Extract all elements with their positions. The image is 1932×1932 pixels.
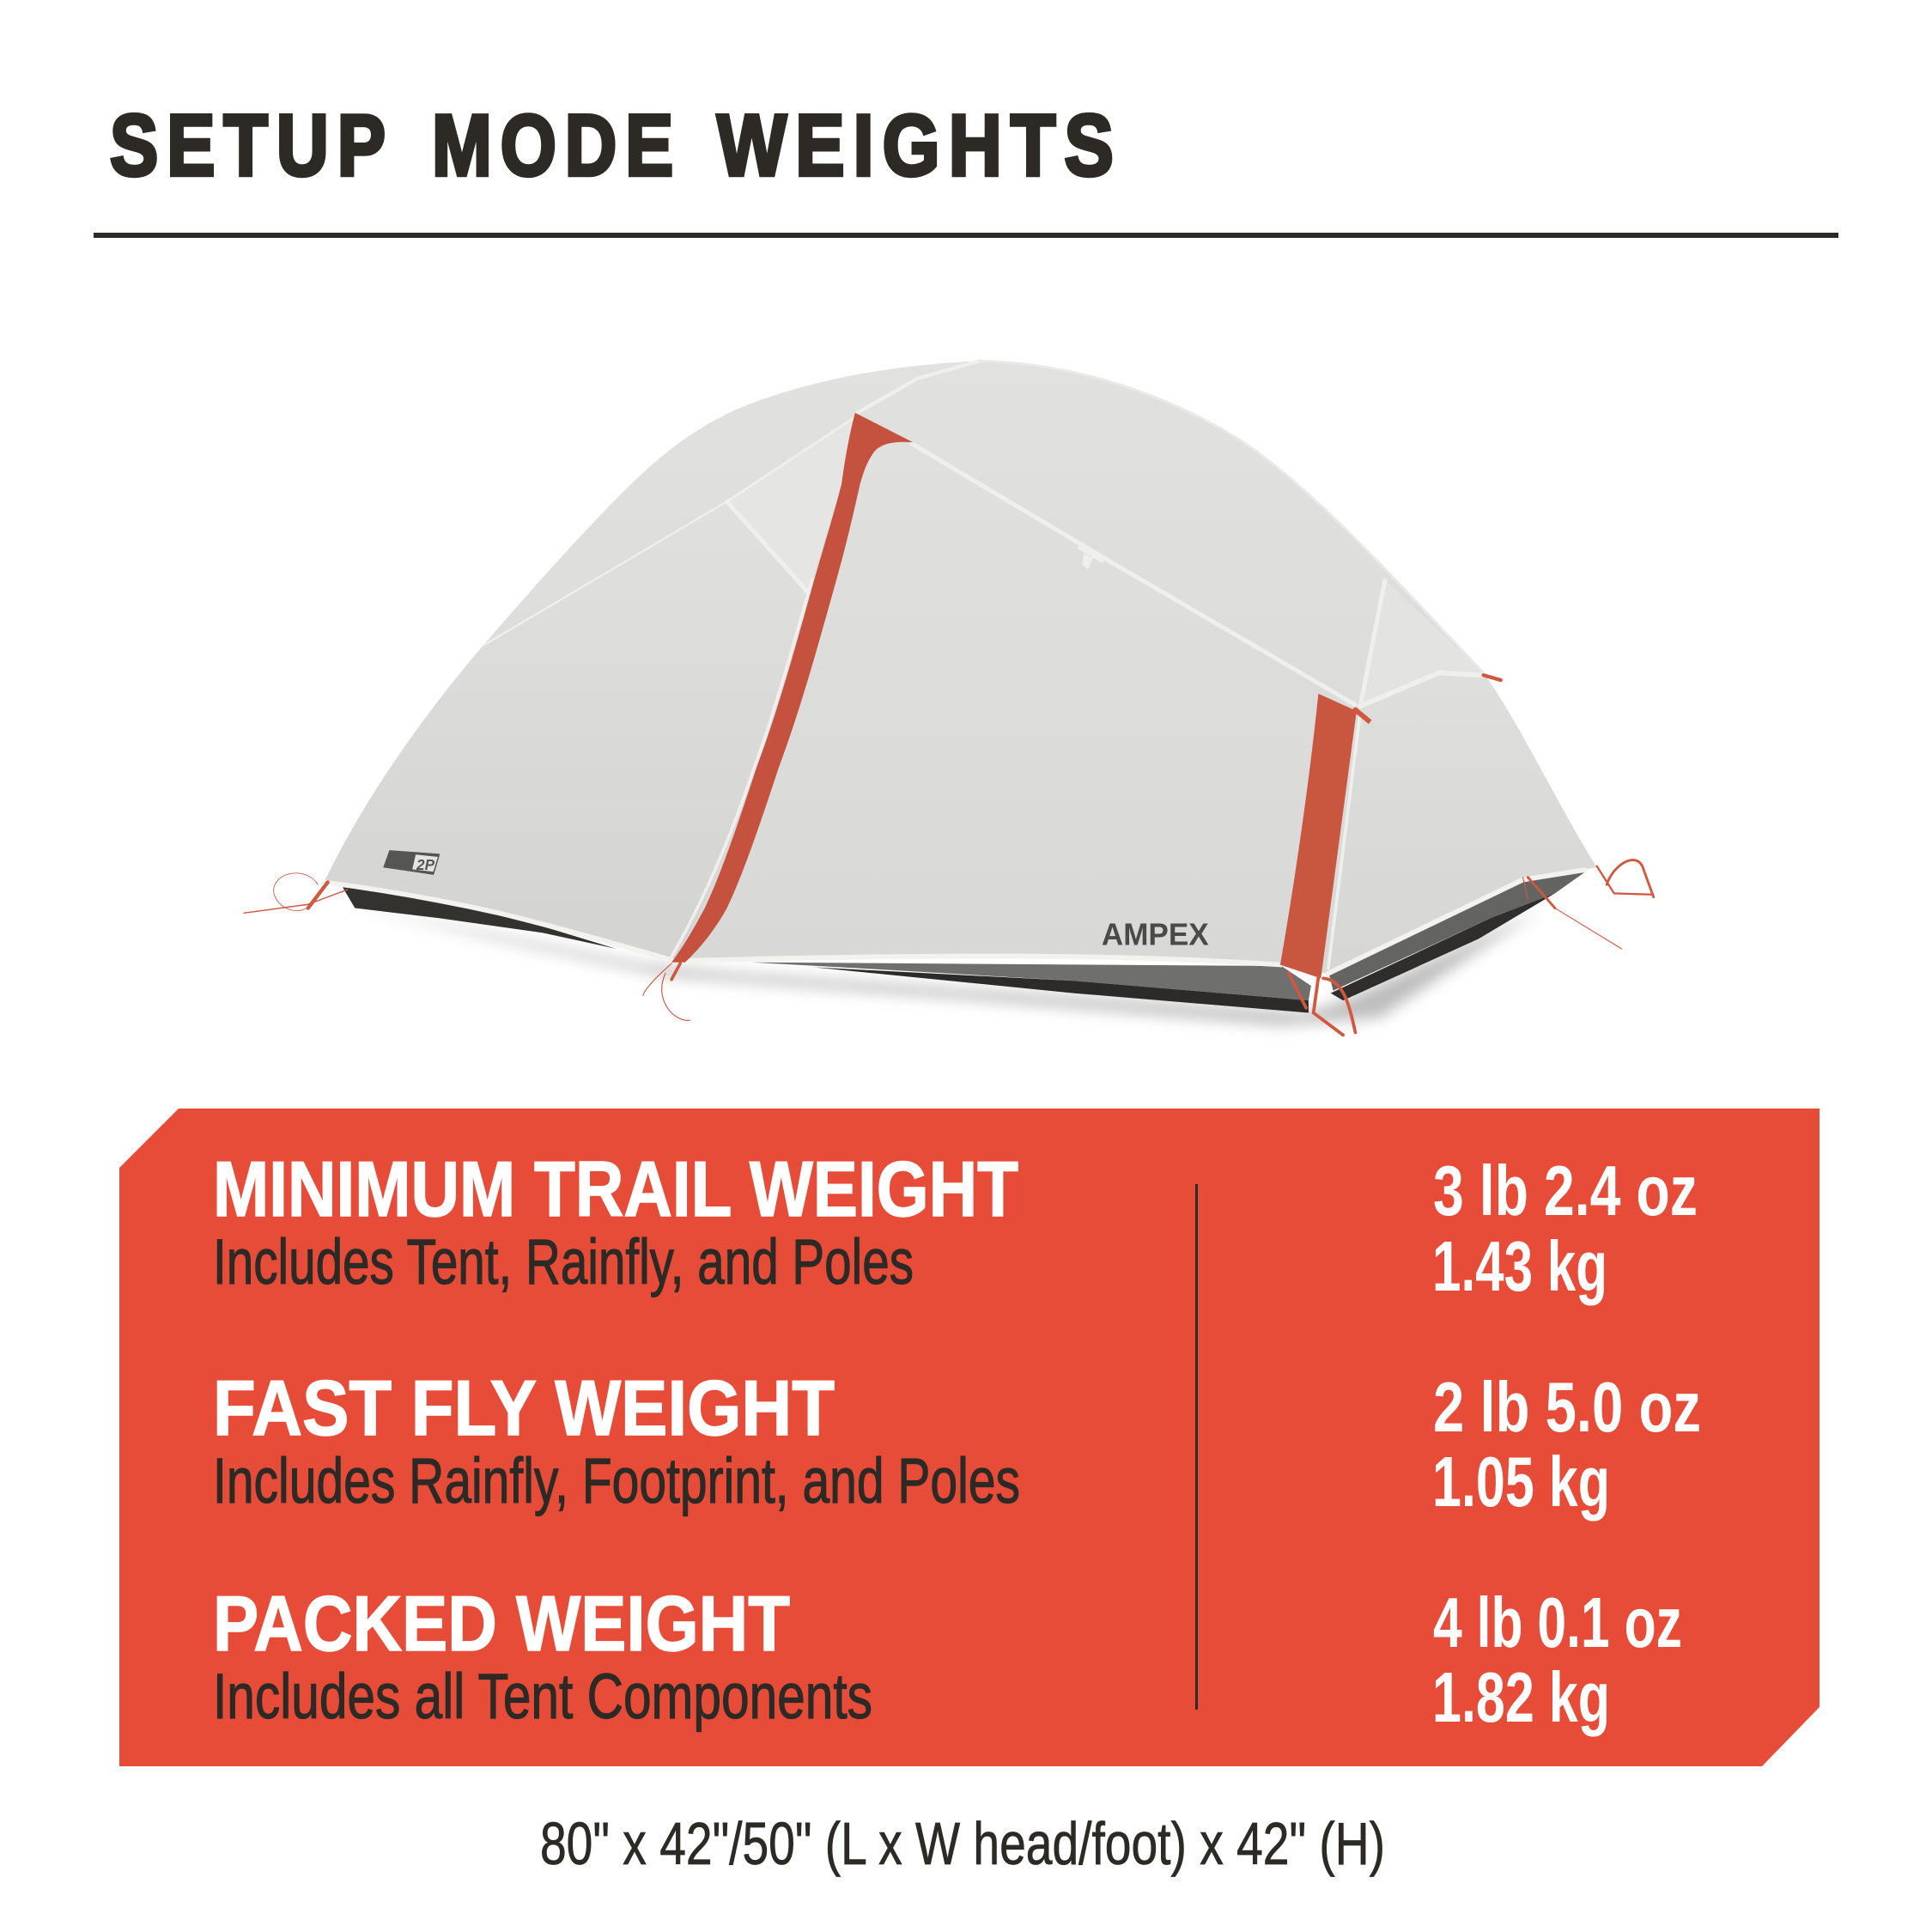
panel: right end <box>1326 672 1597 974</box>
tent floor right dark <box>1331 893 1555 1000</box>
title: SETUP <box>110 98 394 194</box>
title <box>110 98 1122 194</box>
red door zipper front <box>671 413 913 963</box>
panel background <box>119 1109 1820 1766</box>
value: packed imperial: 4 lb 0.1 oz <box>1433 1583 1682 1662</box>
seams <box>324 361 1584 974</box>
title: MODE <box>432 98 682 194</box>
ridge clip <box>1077 542 1107 569</box>
value: fast fly imperial: 2 lb 5.0 oz <box>1433 1367 1701 1447</box>
tent floor right <box>1328 872 1584 991</box>
description: fast fly weight: Includes Rainfly, Footprint, and Poles <box>213 1445 1020 1516</box>
value: packed metric: 1.82 kg <box>1432 1657 1610 1737</box>
tent floor left <box>343 887 616 949</box>
description: minimum trail weight: Includes Tent, Rainfly, and Poles <box>213 1226 914 1297</box>
panel: upper left vent <box>727 416 858 592</box>
dimensions footer: 80" x 42"/50" (L x W head/foot) x 42" (H) <box>540 1810 1385 1877</box>
value: minimum trail metric: 1.43 kg <box>1432 1226 1607 1306</box>
panel: weights <box>119 1109 1820 1766</box>
title: WEIGHTS <box>717 98 1122 194</box>
ground shadow <box>351 906 1540 1025</box>
logo: 2P badge <box>383 850 440 875</box>
value: fast fly metric: 1.05 kg <box>1432 1442 1610 1522</box>
heading: packed weight: PACKED WEIGHT <box>213 1581 790 1668</box>
heading: fast fly weight: FAST FLY WEIGHT <box>213 1365 835 1452</box>
heading: minimum trail weight: MINIMUM TRAIL WEIGHT <box>213 1146 1018 1233</box>
red door zipper rear <box>1280 694 1357 978</box>
logo: 2P badge: 2P <box>416 856 435 873</box>
divider <box>1195 1184 1198 1710</box>
tent floor front gray <box>751 963 1311 1000</box>
panel: upper right vent <box>1360 580 1484 706</box>
panel: left side <box>324 501 808 961</box>
value: minimum trail imperial: 3 lb 2.4 oz <box>1433 1151 1698 1230</box>
guy lines <box>244 675 1654 1035</box>
tent photo illustration <box>244 361 1654 1035</box>
logo: AMPEX: AMPEX <box>1102 918 1209 952</box>
tent floor front dark <box>813 967 1309 1013</box>
description: packed weight: Includes all Tent Components <box>213 1661 872 1732</box>
rainfly body <box>324 361 1597 974</box>
